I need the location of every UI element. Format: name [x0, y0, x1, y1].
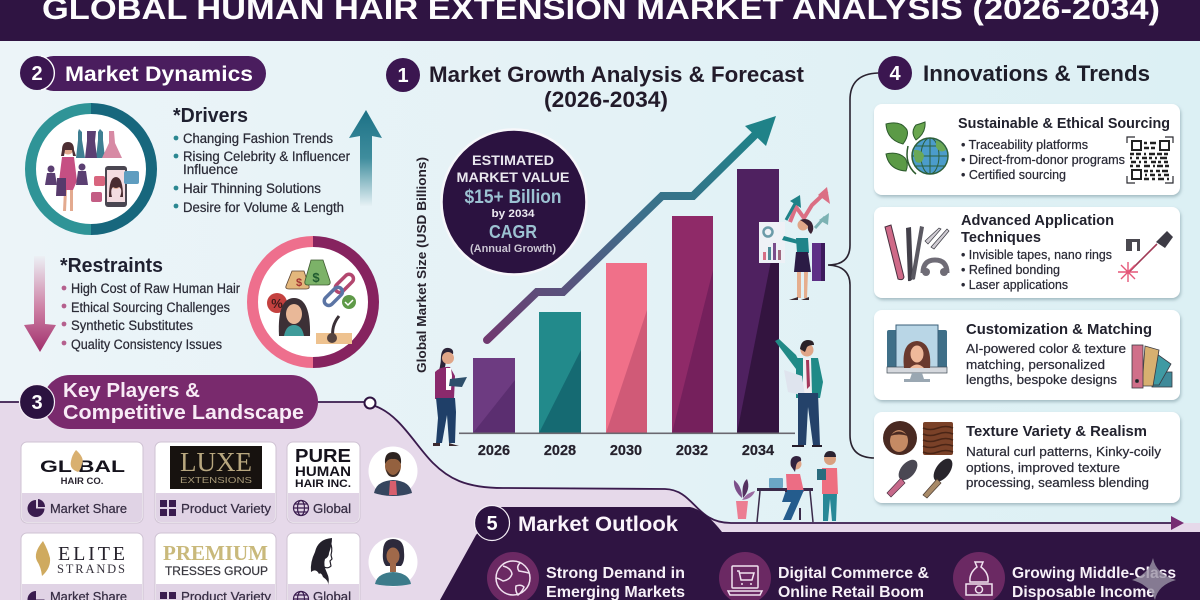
card: customization: matching, personalized [966, 358, 1105, 372]
text block: restraints: Quality Consistency Issues [71, 337, 222, 352]
card: customization [874, 310, 1180, 400]
card: luxe extensions [155, 442, 276, 523]
icon: female executive avatar [368, 538, 418, 586]
card: premium tresses group: PREMIUM [163, 541, 268, 565]
card: luxe extensions: EXTENSIONS [180, 475, 252, 485]
item: digital commerce [719, 552, 929, 600]
arrow: restraints down [24, 256, 56, 352]
panel: market outlook [440, 506, 1200, 600]
card: advanced application: Advanced Application [961, 212, 1114, 229]
callout: estimated market value: $15+ Billion [464, 187, 562, 208]
heading: market dynamics: Market Dynamics [65, 63, 253, 86]
card: global hair co: Market Share [50, 502, 127, 516]
year labels [478, 443, 774, 459]
heading: market growth: (2026-2034) [544, 87, 668, 112]
card: hair silhouette brand [287, 533, 360, 600]
connector line: players to outlook [0, 402, 1172, 523]
callout: estimated market value: ESTIMATED [472, 153, 554, 168]
text block: restraints: Ethical Sourcing Challenges [71, 300, 230, 315]
heading: market dynamics [20, 56, 266, 91]
text block: drivers: Hair Thinning Solutions [183, 181, 321, 196]
heading: key players: 3 [31, 392, 43, 414]
heading: key players: Key Players & [63, 380, 200, 402]
card: global hair co [21, 442, 143, 523]
card: sustainable sourcing: • Traceability platforms [961, 138, 1088, 152]
card: customization: Customization & Matching [966, 321, 1152, 338]
panel: innovations and trends [874, 56, 1180, 503]
text block: restraints [60, 255, 240, 352]
year labels: 2030 [610, 443, 642, 459]
card: advanced application [874, 207, 1180, 298]
item: middle class income [953, 552, 1176, 600]
icon: cost and ethics donut [247, 236, 379, 368]
card: sustainable sourcing [874, 104, 1180, 195]
card: sustainable sourcing: • Certified sourcing [961, 168, 1066, 182]
callout: estimated market value [442, 130, 586, 274]
year labels: 2034 [742, 443, 774, 459]
card: texture variety: processing, seamless blending [966, 476, 1149, 490]
item: emerging markets: Strong Demand in [546, 565, 685, 582]
year labels: 2032 [676, 443, 708, 459]
card: elite strands: ELITE [58, 543, 125, 565]
item: emerging markets [487, 552, 685, 600]
arrow: growth trend [487, 116, 776, 340]
lilac key players background [0, 402, 1200, 600]
callout: estimated market value: CAGR [489, 222, 537, 242]
heading: market growth: 1 [397, 65, 409, 87]
illustration: man presenting [775, 339, 823, 447]
card: texture variety: options, improved texture [966, 461, 1120, 475]
text block: drivers: Desire for Volume & Length [183, 200, 344, 215]
icon: colour swatch fan [1132, 345, 1172, 388]
card: premium tresses group: TRESSES GROUP [165, 564, 268, 578]
item: middle class income: Growing Middle-Class [1012, 565, 1176, 582]
header banner [0, 0, 1200, 41]
card: elite strands [21, 533, 143, 600]
text block: drivers [173, 105, 350, 215]
heading: market outlook: 5 [486, 513, 498, 535]
heading: innovations: Innovations & Trends [923, 61, 1150, 86]
icon: hair tools [885, 225, 1173, 282]
heading: key players: Competitive Landscape [63, 402, 304, 424]
heading: innovations: 4 [889, 63, 901, 85]
y-axis label: Global Market Size (USD Billions) [415, 157, 429, 373]
text block: drivers: Influence [183, 162, 238, 177]
icon: sparkle watermark [1132, 558, 1176, 600]
heading: market outlook [474, 506, 678, 540]
card: texture variety: Texture Variety & Realism [966, 423, 1147, 440]
item: digital commerce: Digital Commerce & [778, 565, 929, 582]
outlook dark band [440, 507, 1200, 600]
connector: growth to innovations bracket [828, 73, 878, 458]
icon: fashion and influencer donut [25, 103, 157, 235]
card: global hair co: HAIR CO. [61, 476, 103, 487]
illustration: desk workers [734, 451, 838, 522]
card: sustainable sourcing: • Direct-from-donor programs [961, 153, 1125, 167]
heading: market dynamics: 2 [31, 63, 43, 85]
text block: drivers: Changing Fashion Trends [183, 131, 333, 146]
text block: restraints: Synthetic Substitutes [71, 318, 193, 333]
icon: cost and ethics donut: % [271, 296, 283, 311]
text block: restraints: *Restraints [60, 255, 163, 277]
card: advanced application: Techniques [961, 229, 1041, 246]
heading: market growth: Market Growth Analysis & Forecast [429, 62, 805, 87]
panel: market growth [386, 58, 838, 522]
card: premium tresses group [155, 533, 276, 600]
text block: drivers: *Drivers [173, 105, 248, 127]
arrow: drivers up [349, 110, 382, 206]
card: advanced application: • Refined bonding [961, 263, 1060, 277]
text block: restraints: High Cost of Raw Human Hair [71, 281, 240, 296]
card: texture variety: Natural curl patterns, Kinky-coily [966, 445, 1162, 459]
callout: estimated market value: (Annual Growth) [470, 243, 556, 255]
icon: cost and ethics donut: $ [296, 277, 302, 289]
card: luxe extensions: Product Variety [181, 502, 272, 516]
panel: market dynamics [20, 56, 382, 368]
bar chart [415, 157, 795, 459]
card: global hair co: GL BAL [40, 457, 125, 476]
card: customization: AI-powered color & texture [966, 342, 1126, 356]
callout: estimated market value: MARKET VALUE [456, 170, 570, 185]
arrow: timeline head [1171, 516, 1184, 530]
icon: hair textures and brushes [883, 421, 956, 498]
heading: market growth [386, 58, 805, 112]
icon: qr code [1127, 137, 1173, 183]
year labels: 2028 [544, 443, 576, 459]
card: sustainable sourcing: Sustainable & Ethical Sourcing [958, 115, 1170, 132]
card: pure human hair inc: PURE [295, 446, 351, 466]
card: elite strands: STRANDS [57, 562, 125, 576]
icon: leaves and globe [886, 122, 948, 174]
icon: cost and ethics donut: $ [312, 270, 320, 285]
card: texture variety [874, 412, 1180, 503]
card: pure human hair inc: Global [313, 502, 351, 516]
card: pure human hair inc: HUMAN [295, 464, 351, 479]
icon: male executive avatar [368, 446, 418, 496]
text block: drivers: Rising Celebrity & Influencer [183, 149, 350, 164]
heading: key players [20, 375, 318, 429]
card: pure human hair inc: HAIR INC. [295, 478, 351, 490]
year labels: 2026 [478, 443, 510, 459]
card: advanced application: • Laser applications [961, 278, 1068, 292]
heading: market outlook: Market Outlook [518, 513, 678, 536]
illustration: woman with charts [759, 187, 830, 300]
card: luxe extensions: LUXE [180, 447, 252, 477]
heading: innovations [878, 56, 1150, 90]
card: customization: lengths, bespoke designs [966, 373, 1117, 387]
panel: key players [0, 375, 1184, 600]
connector node [364, 398, 376, 408]
icon: monitor with portrait [887, 325, 947, 382]
card: pure human hair inc [287, 442, 360, 523]
callout: estimated market value: by 2034 [492, 208, 535, 220]
card: advanced application: • Invisible tapes, nano rings [961, 248, 1112, 262]
illustration: woman with tablet [433, 348, 467, 446]
bars [473, 169, 779, 433]
